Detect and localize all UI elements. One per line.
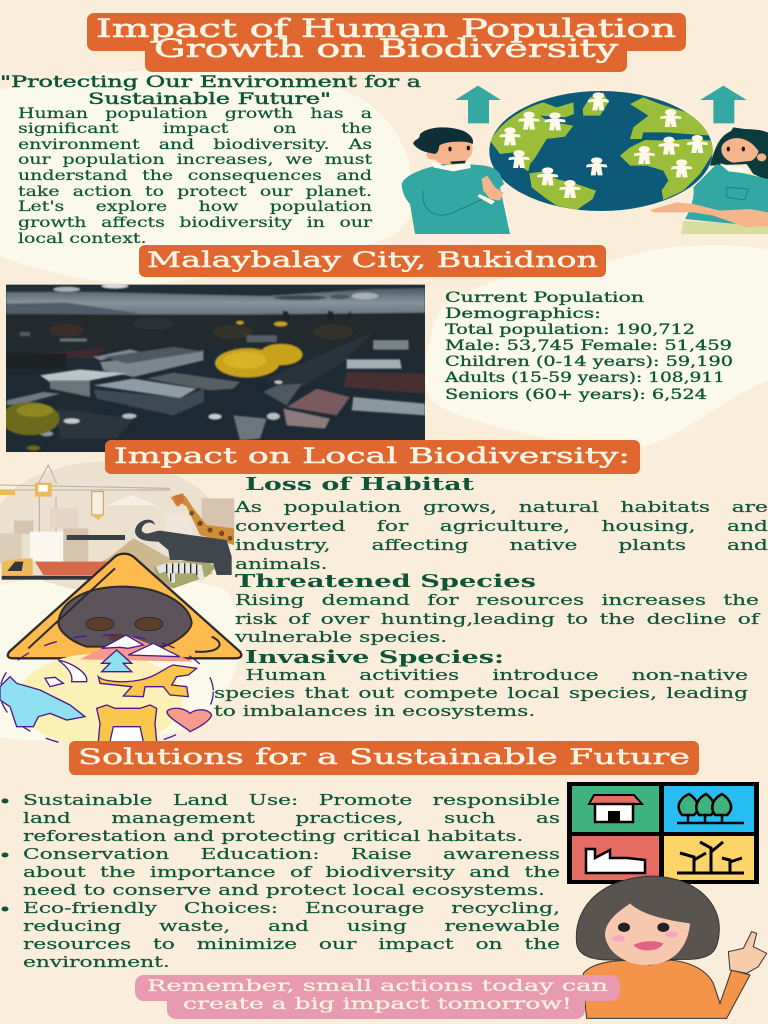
closing message: Remember, small actions today can [147,976,608,995]
text block: solutions list: reforestation and protecting critical habitats. [23,829,523,845]
closing message: create a big impact tomorrow! [183,994,572,1013]
photo: aerial view of the city [1,284,425,452]
icon grid: land use [567,782,759,884]
subtitle quote: "Protecting Our Environment for a [0,73,421,91]
text block: invasive species [214,668,748,720]
heading: Malaybalay City, Bukidnon: Malaybalay City, Bukidnon [147,248,598,272]
text: current population demographics: Children (0-14 years): 59,190 [445,354,733,370]
icon: up arrow left [455,86,501,123]
text block: introduction: environment and biodiversity. As [18,137,372,153]
subtitle quote [0,73,421,108]
text block: invasive species: Human activities introduce non-native [246,668,748,684]
text block: solutions list: environment. [23,955,170,971]
text block: introduction: significant impact on the [18,121,372,137]
text block: threatened species: risk of over hunting,leading to the decline of [235,612,759,628]
icon: globe [489,91,713,211]
heading: Threatened Species: Threatened Species [235,571,536,592]
icon: house [589,795,642,822]
text: current population demographics: Total population: 190,712 [445,322,695,338]
icon: factory [586,849,645,873]
text block: invasive species: to imbalances in ecosystems. [214,704,535,720]
illustration: people holding a populated globe [402,86,768,234]
text block: solutions list: Sustainable Land Use: Promote responsible [23,793,560,809]
text: current population demographics: Adults (15-59 years): 108,911 [444,370,725,386]
background blobs [0,70,768,742]
text block: solutions list: Conservation Education: Raise awareness [23,847,560,863]
heading: Impact on Local Biodiversity: Impact on Local Biodiversity: [114,444,630,468]
text block: introduction: Human population growth has a [18,106,372,122]
heading: Impact on Local Biodiversity [105,440,640,474]
bullet markers [2,798,8,912]
text block: introduction: local context. [18,231,147,247]
text block: solutions list: Eco-friendly Choices: Encourage recycling, [23,901,560,917]
text block: loss of habitat: industry, affecting native plants and [235,538,768,554]
icon: warning triangle with skull [8,554,241,658]
text block: introduction [18,106,372,247]
subtitle quote: Sustainable Future" [88,90,331,108]
text: current population demographics: Male: 53,745 Female: 51,459 [445,338,732,354]
icon: zebra [156,563,205,583]
heading: Solutions for a Sustainable Future: Solutions for a Sustainable Future [78,745,690,769]
heading: Solutions for a Sustainable Future [69,741,699,775]
text block: loss of habitat [234,500,768,572]
text block: introduction: our population increases, we must [18,152,372,168]
text block: introduction: Let's explore how population [18,199,372,215]
text block: solutions list: reducing waste, and using renewable [23,919,560,935]
icon: man [402,127,510,234]
heading: Invasive Species: Invasive Species: [245,647,504,668]
text block: threatened species: Rising demand for resources increases the [235,593,759,609]
text block: loss of habitat: animals. [235,556,328,572]
icon: dead trees [677,842,744,873]
text: current population demographics [444,290,733,403]
icon: giraffe [171,493,234,545]
icon: elephant [135,520,232,575]
heading: Malaybalay City, Bukidnon [139,245,606,277]
icon: endangered species circle [0,635,213,748]
text: current population demographics: Demographics: [445,306,601,322]
text: current population demographics: Seniors (60+ years): 6,524 [445,387,707,403]
icon: up arrow right [700,86,747,123]
illustration: city expansion and displaced wildlife [0,462,241,748]
icon: truck [2,558,110,580]
illustration: girl pointing up [576,876,767,1018]
text block: introduction: take action to protect our planet. [18,184,372,200]
text block: solutions list: land management practices, such as [23,811,560,827]
text block: solutions list [23,793,560,971]
text block: solutions list: need to conserve and protect local ecosystems. [23,883,545,899]
icon: woman [650,127,768,234]
text block: loss of habitat: As population grows, natural habitats are [235,500,768,516]
heading: Loss of Habitat: Loss of Habitat [245,474,475,495]
text block: solutions list: resources to minimize our impact on the [23,937,560,953]
icon: trees [677,794,744,823]
text block: introduction: understand the consequences and [18,168,372,184]
text block: solutions list: about the importance of biodiversity and the [23,865,560,881]
title banner: Impact of Human Population [96,14,676,43]
text block: threatened species: vulnerable species. [235,630,447,646]
title banner: Growth on Biodiversity [154,34,619,63]
text block: threatened species [234,593,760,646]
text block: introduction: growth affects biodiversity in our [18,215,372,231]
title banner [87,13,686,72]
closing message [135,975,620,1019]
text block: loss of habitat: converted for agriculture, housing, and [235,518,768,534]
text: current population demographics: Current Population [445,290,644,306]
text block: invasive species: species that out compete local species, leading [214,686,748,702]
